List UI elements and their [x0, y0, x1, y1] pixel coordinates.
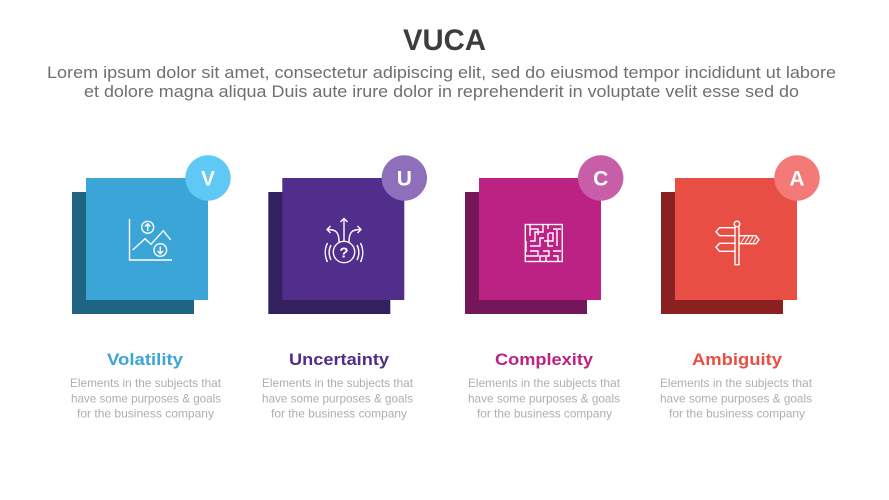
description [70, 376, 222, 420]
description: for the business company [77, 406, 214, 420]
letter badge V [185, 155, 231, 201]
description: Elements in the subjects that [468, 376, 621, 390]
heading: Complexity [495, 350, 594, 369]
description [468, 376, 621, 420]
description: Elements in the subjects that [262, 376, 414, 390]
description: have some purposes & goals [71, 392, 221, 406]
heading: Volatility [107, 350, 184, 369]
description: Elements in the subjects that [70, 376, 222, 390]
panel: complexity [465, 155, 623, 421]
letter badge U: U [397, 168, 412, 190]
title: VUCA [403, 24, 486, 57]
front square [479, 178, 601, 300]
description [660, 376, 813, 420]
description: have some purposes & goals [660, 392, 812, 406]
description: have some purposes & goals [468, 392, 620, 406]
icon: chart with up and down arrows [130, 219, 172, 260]
letter badge C: C [593, 168, 608, 190]
icon: maze [525, 224, 562, 262]
letter badge U [382, 155, 427, 201]
description [262, 376, 414, 420]
subtitle: Lorem ipsum dolor sit amet, consectetur adipiscing elit, sed do eiusmod tempor incididunt ut labore [47, 63, 836, 82]
heading: Uncertainty [289, 350, 390, 369]
subtitle: et dolore magna aliqua Duis aute irure dolor in reprehenderit in voluptate velit esse sed do [84, 82, 799, 101]
description: Elements in the subjects that [660, 376, 813, 390]
letter badge A: A [789, 168, 805, 190]
icon: question with diverging arrows [325, 218, 363, 263]
panel: uncertainty [262, 155, 427, 421]
heading: Ambiguity [692, 350, 783, 369]
back square [661, 192, 783, 314]
letter badge C [578, 155, 623, 201]
front square [86, 178, 208, 300]
description: for the business company [271, 406, 407, 420]
letter badge V: V [201, 168, 215, 190]
description: for the business company [477, 406, 612, 420]
front square [675, 178, 797, 300]
panel: ambiguity [660, 155, 820, 421]
back square [268, 192, 390, 314]
letter badge A [774, 155, 820, 201]
icon: signpost [716, 221, 759, 265]
subtitle [47, 63, 836, 101]
front square [282, 178, 404, 300]
back square [465, 192, 587, 314]
panel: volatility [70, 155, 231, 421]
back square [72, 192, 194, 314]
icon: question with diverging arrows: ? [339, 244, 349, 262]
description: have some purposes & goals [262, 392, 413, 406]
description: for the business company [669, 406, 805, 420]
